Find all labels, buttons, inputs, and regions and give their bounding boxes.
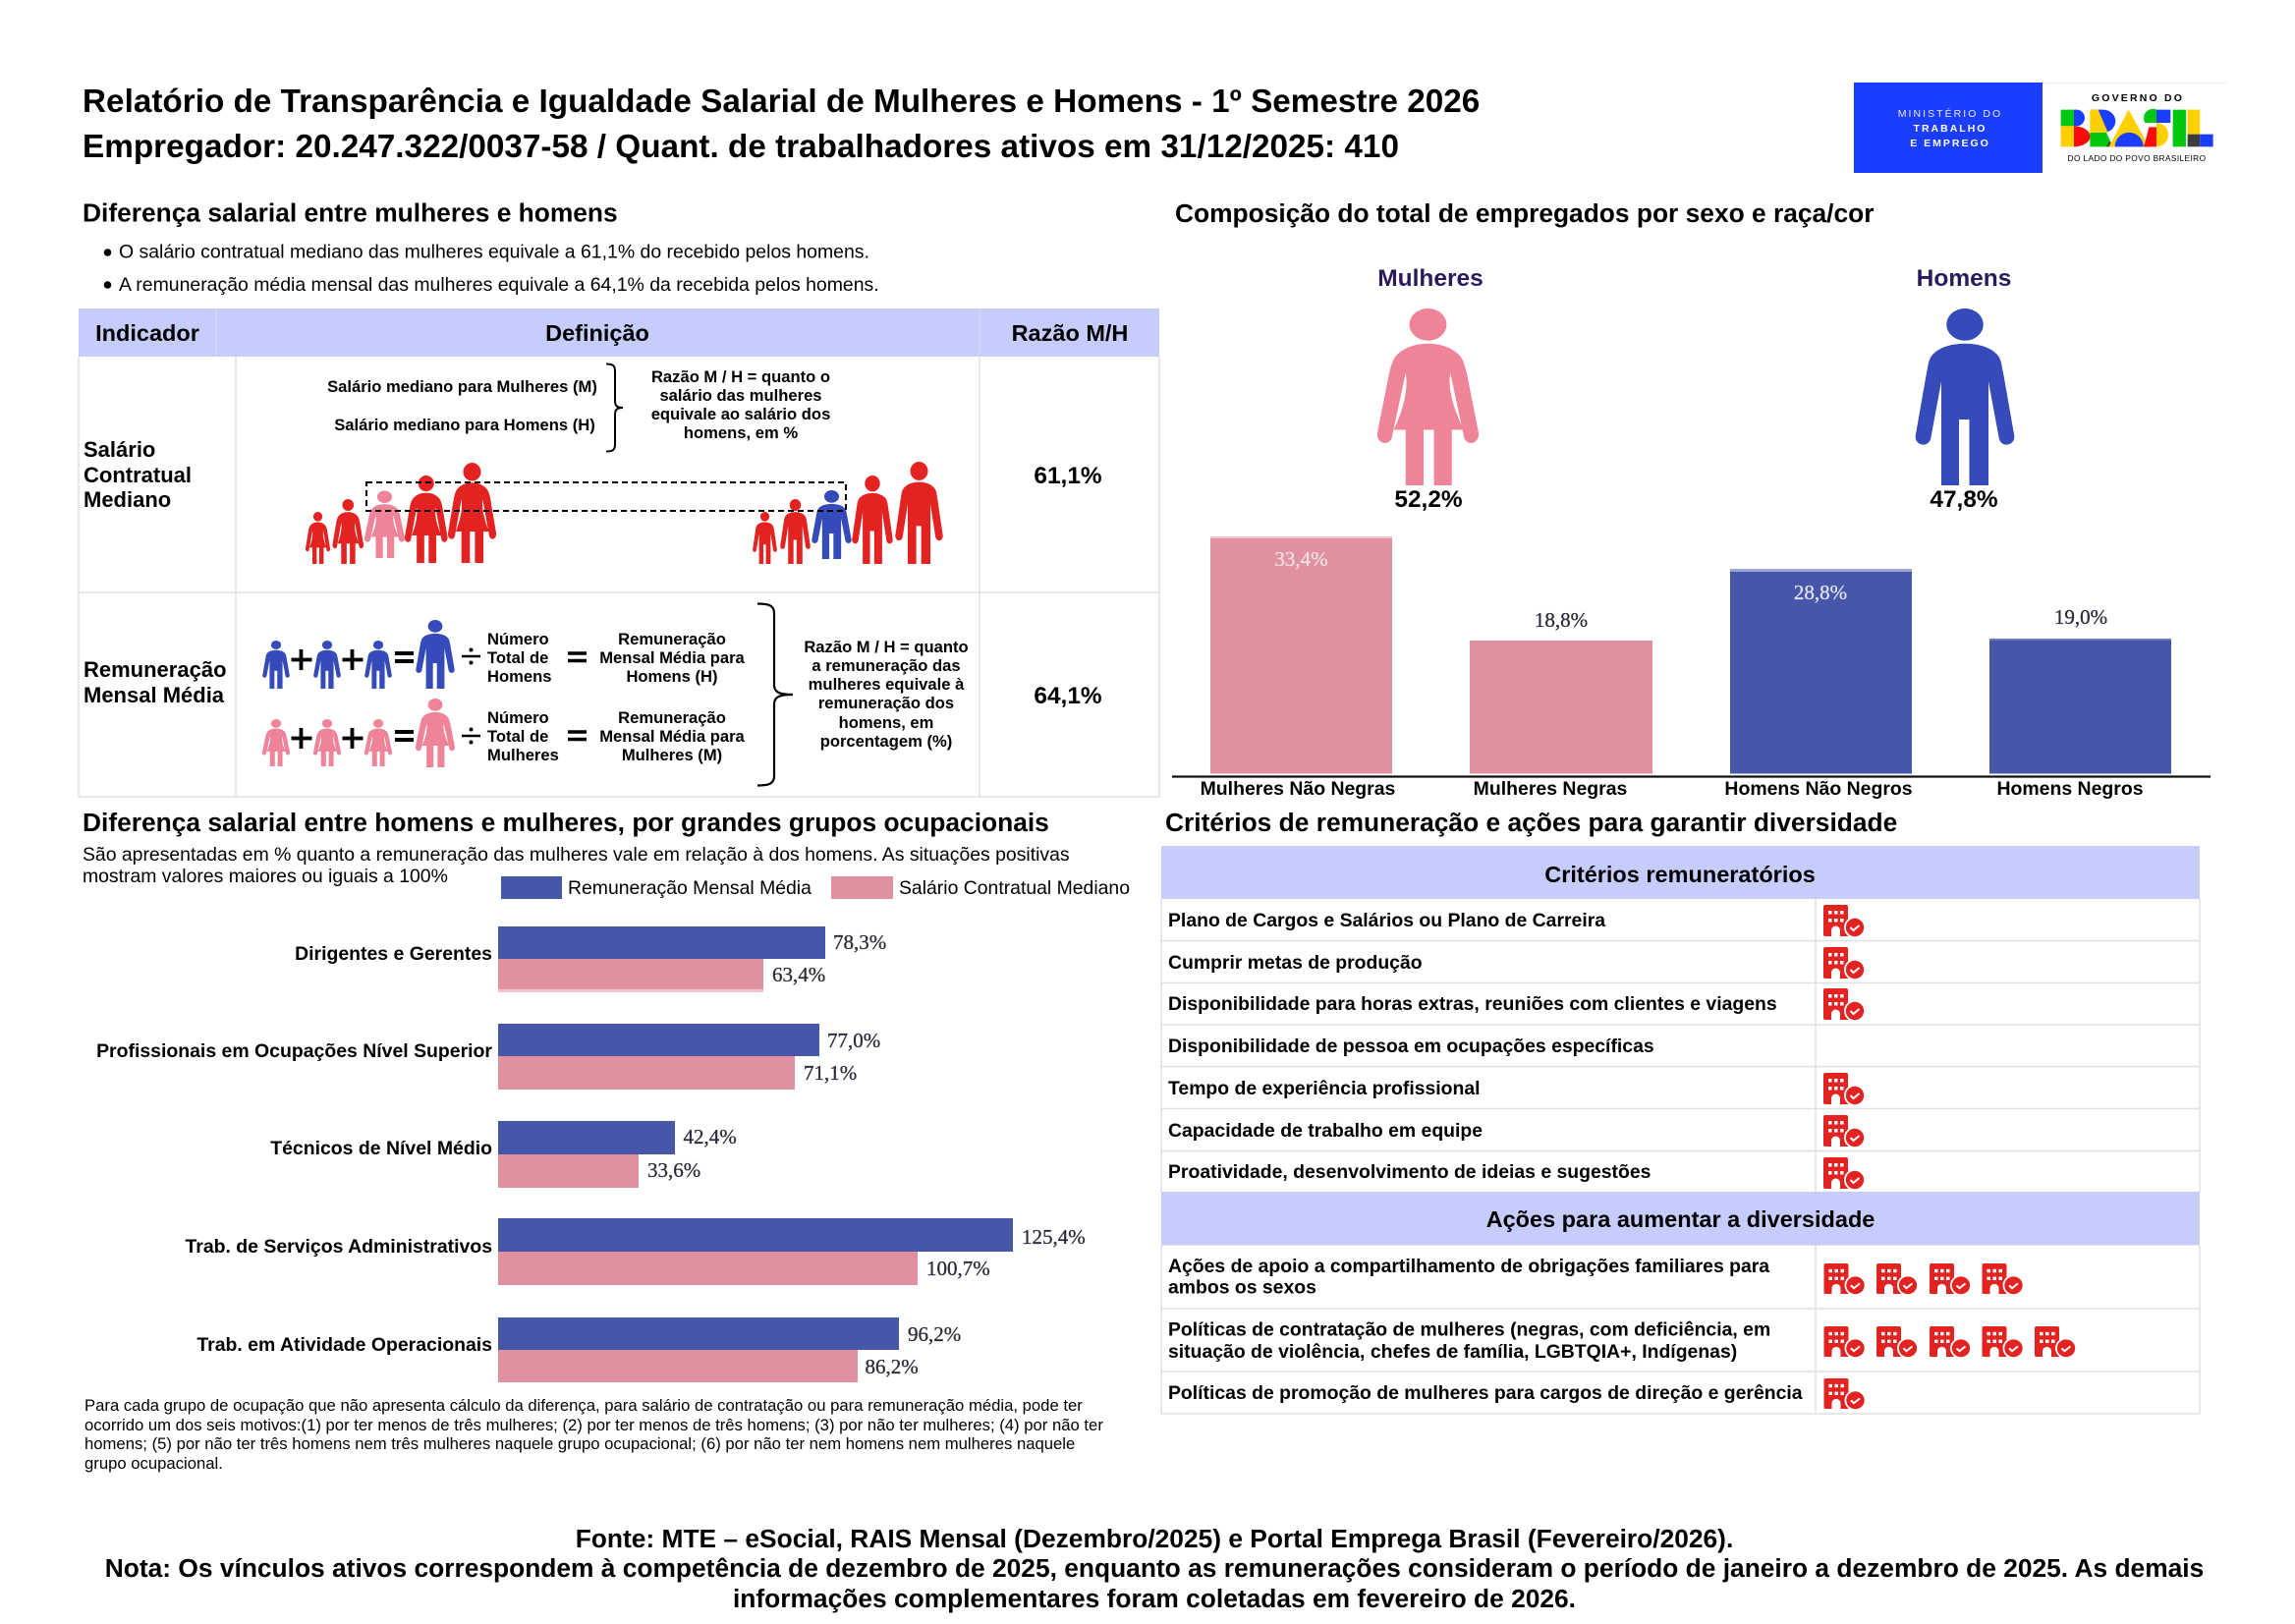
title: Empregador: 20.247.322/0037-58 / Quant. de trabalhadores ativos em 31/12/2025: 410 (83, 129, 1399, 165)
group: Trab. em Atividade Operacionais (196, 1317, 961, 1382)
text block: explanation: São apresentadas em % quanto a remuneração das mulheres vale em relação à dos homens. As situações positivas (83, 844, 1070, 866)
definition text: salários: Salário mediano para Mulheres (M) (327, 377, 597, 396)
formula: men: Total de (487, 648, 548, 667)
value: 64,1%: 64,1% (1034, 683, 1102, 709)
row: equipe: Capacidade de trabalho em equipe (1168, 1120, 1483, 1142)
row: metas (1168, 947, 1866, 980)
table header: Definição (545, 320, 649, 346)
row: equipe (1168, 1115, 1866, 1148)
row: plano de cargos: Plano de Cargos e Salários ou Plano de Carreira (1168, 910, 1605, 931)
bar chart: composition: Homens Negros (1996, 778, 2144, 800)
value: 52,2%: 52,2% (1394, 486, 1463, 513)
panel: critérios de remuneração e ações (1161, 808, 2200, 1414)
definition text: razão: homens, em % (684, 423, 798, 442)
text block: explanation (83, 844, 1070, 887)
logo: Governo do Brasil: DO LADO DO POVO BRASILEIRO (2068, 153, 2207, 163)
text block: key findings: A remuneração média mensal das mulheres equivale a 64,1% da recebida pelos homens. (119, 274, 879, 296)
table header: Ações para aumentar a diversidade (1486, 1206, 1875, 1232)
definition text: salários (327, 377, 597, 434)
logo: Ministério do Trabalho e Emprego: MINISTÉRIO DO (1898, 107, 2002, 120)
definition text: razão: porcentagem (%) (820, 732, 952, 751)
formula: men: Mensal Média para (599, 648, 746, 667)
group: Trab. em Atividade Operacionais: 96,2% (908, 1322, 961, 1346)
logo: Governo do Brasil (2043, 83, 2228, 163)
text block: key findings (104, 242, 879, 296)
text block: key findings: O salário contratual mediano das mulheres equivale a 61,1% do recebido pelos homens. (119, 242, 869, 263)
row: remuneração mensal média (84, 603, 1102, 786)
group: Técnicos de Nível Médio (270, 1121, 737, 1188)
median highlight box (366, 482, 846, 511)
group: Trab. de Serviços Administrativos: Trab. de Serviços Administrativos (185, 1236, 492, 1258)
definition text: razão: Razão M / H = quanto (804, 638, 969, 656)
row: promoção (1168, 1378, 1867, 1411)
group: Trab. em Atividade Operacionais: Trab. em Atividade Operacionais (196, 1334, 492, 1356)
row: metas: Cumprir metas de produção (1168, 952, 1423, 974)
table header: Critérios remuneratórios (1544, 862, 1816, 887)
text block: footnote: homens; (5) por não ter três homens nem três mulheres naquele grupo ocupacional; (6) por não ter nem homens nem mulheres naquele (84, 1434, 1075, 1453)
heading: diferença salarial: Diferença salarial entre mulheres e homens (83, 198, 618, 228)
bar chart: composition: 19,0% (2054, 605, 2107, 629)
group: Técnicos de Nível Médio: 42,4% (684, 1125, 737, 1148)
bar chart: occupational groups (96, 926, 1086, 1382)
heading: composição: Composição do total de empregados por sexo e raça/cor (1175, 198, 1874, 228)
value: 61,1%: 61,1% (1034, 463, 1102, 489)
logo: Ministério do Trabalho e Emprego (1854, 83, 2043, 173)
group: Técnicos de Nível Médio: Técnicos de Nível Médio (270, 1138, 492, 1159)
panel: diferença por grandes grupos ocupacionais (83, 808, 1130, 1473)
group: Dirigentes e Gerentes: 78,3% (833, 930, 886, 954)
text block: footnote (84, 1396, 1103, 1473)
footer: fonte e nota: Fonte: MTE – eSocial, RAIS Mensal (Dezembro/2025) e Portal Emprega Brasil (Fevereiro/2026). (576, 1524, 1733, 1553)
group: Trab. de Serviços Administrativos: 125,4% (1022, 1225, 1086, 1249)
text block: footnote: grupo ocupacional. (84, 1454, 223, 1473)
formula: women: Mensal Média para (599, 727, 746, 746)
row label (84, 657, 227, 707)
group: Profissionais em Ocupações Nível Superior: 71,1% (804, 1061, 857, 1085)
row: promoção: Políticas de promoção de mulheres para cargos de direção e gerência (1168, 1382, 1803, 1404)
label: Homens: Homens (1917, 265, 2011, 292)
row: ocupações específicas: Disponibilidade de pessoa em ocupações específicas (1168, 1036, 1654, 1057)
row: proatividade (1168, 1157, 1866, 1191)
group: Técnicos de Nível Médio: 33,6% (647, 1158, 700, 1182)
formula: men: Número (487, 630, 549, 648)
label: Mulheres: Mulheres (1377, 265, 1483, 292)
logo: Ministério do Trabalho e Emprego: E EMPREGO (1910, 138, 1990, 149)
footer: fonte e nota: informações complementares foram coletadas em fevereiro de 2026. (733, 1584, 1576, 1613)
title (83, 84, 1480, 165)
value: 47,8%: 47,8% (1930, 486, 1998, 513)
definition text: razão (651, 367, 830, 442)
row: experiência: Tempo de experiência profissional (1168, 1078, 1481, 1099)
bar chart: composition: 18,8% (1535, 608, 1588, 632)
definition text: razão: mulheres equivale à (809, 675, 965, 694)
row: horas extras: Disponibilidade para horas extras, reuniões com clientes e viagens (1168, 993, 1777, 1015)
bar chart: composition: 28,8% (1794, 581, 1847, 604)
definition text: razão: equivale ao salário dos (651, 405, 830, 423)
group: Profissionais em Ocupações Nível Superior (96, 1024, 880, 1090)
row: apoio familiar: Ações de apoio a compartilhamento de obrigações familiares para (1168, 1256, 1769, 1277)
bar chart: composition: Homens Não Negros (1724, 778, 1913, 800)
formula: men: Homens (487, 667, 551, 686)
logo: Governo do Brasil: GOVERNO DO (2092, 92, 2184, 104)
icon: man (1916, 308, 2014, 485)
row: contratação: Políticas de contratação de mulheres (negras, com deficiência, em (1168, 1318, 1770, 1340)
legend: Remuneração Mensal Média (568, 877, 812, 899)
formula: men: Remuneração (618, 630, 726, 648)
table header (79, 308, 1159, 357)
text block: footnote: ocorrido um dos seis motivos:(1) por ter menos de três mulheres; (2) por ter menos de três homens; (3) por não ter mulheres; (4) por não ter (84, 1416, 1103, 1434)
logo: Ministério do Trabalho e Emprego: TRABALHO (1914, 123, 1987, 135)
panel: indicator table (79, 308, 1159, 797)
row label: Mensal Média (84, 683, 225, 707)
formula: women (262, 699, 746, 767)
definition text: razão (804, 638, 969, 751)
row: contratação (1168, 1318, 2077, 1363)
group: Profissionais em Ocupações Nível Superior: Profissionais em Ocupações Nível Superior (96, 1040, 492, 1062)
table header: Indicador (95, 320, 199, 346)
legend (501, 876, 1130, 899)
row: salário contratual mediano (84, 364, 1102, 564)
row label (84, 437, 192, 512)
bar chart: composition: Mulheres Não Negras (1201, 778, 1396, 800)
legend: Salário Contratual Mediano (899, 877, 1130, 899)
row: proatividade: Proatividade, desenvolvimento de ideias e sugestões (1168, 1161, 1651, 1183)
bar chart: composition: Mulheres Negras (1474, 778, 1628, 800)
row label: Contratual (84, 463, 192, 487)
row: plano de cargos (1168, 905, 1866, 938)
title: Relatório de Transparência e Igualdade Salarial de Mulheres e Homens - 1º Semestre 2026 (83, 84, 1480, 120)
text block: explanation: mostram valores maiores ou iguais a 100% (83, 866, 448, 887)
icon: men group (753, 462, 943, 564)
panel: diferença salarial entre mulheres e homens (83, 198, 879, 296)
row label: Remuneração (84, 657, 227, 682)
row: horas extras (1168, 988, 1866, 1022)
table: ações para aumentar a diversidade (1161, 1192, 2200, 1414)
icon: woman (1377, 308, 1479, 485)
definition text: salários: Salário mediano para Homens (H) (334, 416, 595, 434)
row: apoio familiar: ambos os sexos (1168, 1277, 1316, 1299)
group: Trab. de Serviços Administrativos: 100,7% (926, 1257, 990, 1280)
heading: grupos ocupacionais: Diferença salarial entre homens e mulheres, por grandes grupos ocupacionais (83, 808, 1049, 837)
definition text: razão: homens, em (839, 713, 933, 732)
row: contratação: situação de violência, chefes de família, LGBTQIA+, Indígenas) (1168, 1341, 1737, 1363)
row label: Mediano (84, 487, 171, 512)
group: Dirigentes e Gerentes: Dirigentes e Gerentes (295, 943, 492, 965)
definition text: razão: salário das mulheres (659, 386, 822, 405)
table header: Razão M/H (1012, 320, 1128, 346)
footer: fonte e nota (105, 1524, 2204, 1613)
formula: women: Número (487, 708, 549, 727)
panel: composição por sexo e raça (1172, 198, 2211, 800)
heading: critérios: Critérios de remuneração e ações para garantir diversidade (1165, 808, 1897, 837)
definition text: razão: Razão M / H = quanto o (651, 367, 830, 386)
icon: women group (306, 463, 496, 564)
bar chart: composition: 33,4% (1274, 547, 1328, 571)
bar chart: composition (1172, 536, 2211, 800)
formula: women: Total de (487, 727, 548, 746)
formula: women: Mulheres (M) (622, 746, 722, 764)
group: Trab. em Atividade Operacionais: 86,2% (865, 1355, 919, 1378)
group: Profissionais em Ocupações Nível Superior: 77,0% (827, 1029, 880, 1052)
definition text: razão: a remuneração das (812, 656, 961, 675)
table header (1161, 1192, 2200, 1246)
row label: Salário (84, 437, 155, 462)
group: Dirigentes e Gerentes (295, 926, 886, 992)
group: Trab. de Serviços Administrativos (185, 1218, 1086, 1285)
icon: large brace (757, 603, 793, 786)
formula: men (262, 620, 746, 689)
row: apoio familiar (1168, 1256, 2024, 1299)
definition text: razão: remuneração dos (818, 694, 954, 712)
text block: footnote: Para cada grupo de ocupação que não apresenta cálculo da diferença, para salário de contratação ou para remuneração média, pode ter (84, 1396, 1083, 1415)
formula: men: Homens (H) (626, 667, 718, 686)
icon: brace (606, 364, 623, 452)
footer: fonte e nota: Nota: Os vínculos ativos correspondem à competência de dezembro de 2025, enquanto as remunerações consideram o período de janeiro a dezembro de 2025. As demais (105, 1553, 2204, 1583)
row: experiência (1168, 1073, 1866, 1106)
formula: women: Remuneração (618, 708, 726, 727)
table header (1161, 846, 2200, 899)
formula: women: Mulheres (487, 746, 559, 764)
group: Dirigentes e Gerentes: 63,4% (772, 963, 825, 986)
table: critérios remuneratórios (1161, 846, 2200, 1193)
